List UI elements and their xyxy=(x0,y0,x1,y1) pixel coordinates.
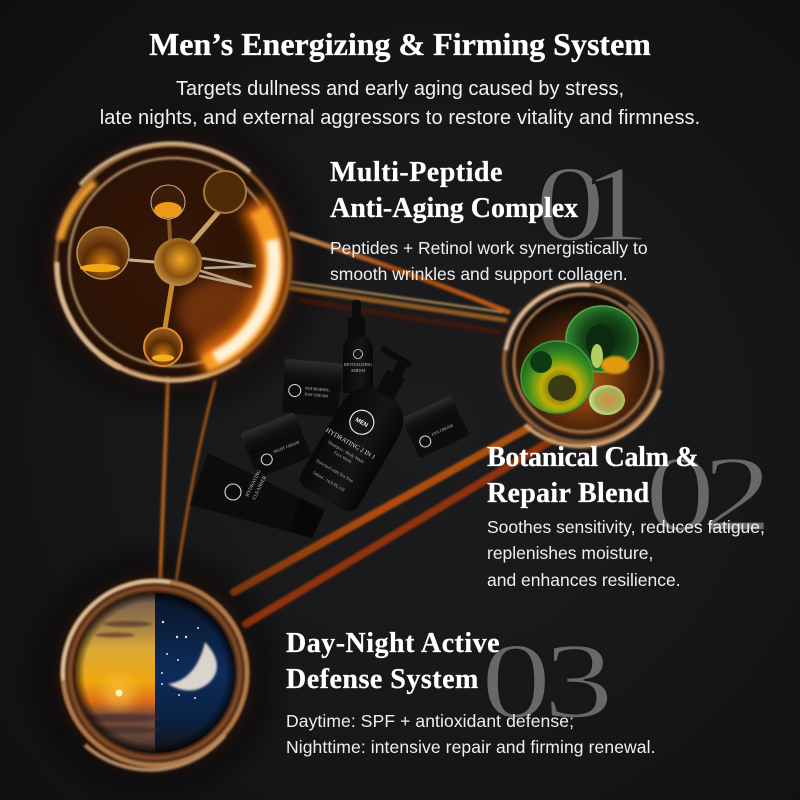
product: eye cream jar: EYE CREAM xyxy=(431,422,454,437)
feature 1 heading: Multi-Peptide xyxy=(330,157,503,188)
product: night cream jar: NIGHT CREAM xyxy=(272,439,300,454)
title: Men’s Energizing & Firming System xyxy=(149,26,651,62)
feature 3 heading xyxy=(286,628,500,694)
subtitle: Targets dullness and early aging caused by stress, xyxy=(176,78,624,100)
product: pump bottle: Shampoo / Body Wash xyxy=(327,439,366,465)
feature 3 heading: Day-Night Active xyxy=(286,628,500,659)
product: pump bottle: Face Wash xyxy=(333,450,353,464)
feature 3 description xyxy=(286,711,656,757)
feature 3 description: Daytime: SPF + antioxidant defense; xyxy=(286,711,574,731)
product: tube cleanser: CLEANSER xyxy=(252,475,268,501)
molecule arms xyxy=(130,208,256,328)
connecting light beams xyxy=(160,234,552,624)
product: tube cleanser: HYDRATING xyxy=(245,469,263,498)
product: pump bottle xyxy=(296,342,434,515)
feature 1 heading: Anti-Aging Complex xyxy=(330,192,578,224)
feature 2 heading xyxy=(487,442,698,508)
product: pump bottle: 500ml / 16.9 FL.OZ xyxy=(312,470,346,493)
icon: botanical cell sphere xyxy=(501,281,665,446)
product: pump bottle: Enriched with Tea Tree xyxy=(315,458,354,484)
numeral 03: 03 xyxy=(481,622,606,741)
product: eye cream jar xyxy=(401,395,470,458)
product group xyxy=(190,300,470,538)
feature 1 description xyxy=(330,238,648,284)
icon: day and night sphere xyxy=(53,571,257,775)
product: tube cleanser xyxy=(190,453,325,538)
numeral 01: 01 xyxy=(535,145,626,264)
feature 2 description: replenishes moisture, xyxy=(487,543,653,563)
feature 2 description xyxy=(487,517,765,590)
product: night cream jar xyxy=(240,412,312,478)
product: day cream jar: NOURISHING xyxy=(305,385,330,393)
feature 2 description: and enhances resilience. xyxy=(487,570,681,590)
subtitle: late nights, and external aggressors to restore vitality and firmness. xyxy=(100,107,700,129)
feature 3 heading: Defense System xyxy=(286,664,479,694)
feature 1 description: Peptides + Retinol work synergistically to xyxy=(330,238,648,258)
product: day cream jar xyxy=(281,359,343,417)
product: serum dropper xyxy=(343,300,373,393)
feature 1 description: smooth wrinkles and support collagen. xyxy=(330,264,628,284)
icon: molecule sphere xyxy=(45,134,301,390)
product: pump bottle: HYDRATING 2 IN 1 xyxy=(324,427,376,461)
product: serum dropper: REVITALIZING xyxy=(344,362,372,367)
feature 2 description: Soothes sensitivity, reduces fatigue, xyxy=(487,517,765,537)
feature 1 heading xyxy=(330,157,578,224)
product: pump bottle: MEN xyxy=(354,417,369,429)
subtitle xyxy=(100,78,700,129)
feature 2 heading: Botanical Calm & xyxy=(487,442,698,473)
numeral 02: 02 xyxy=(645,435,759,554)
feature 3 description: Nighttime: intensive repair and firming renewal. xyxy=(286,737,656,757)
product: day cream jar: DAY CREAM xyxy=(304,391,328,398)
product: serum dropper: SERUM xyxy=(351,368,365,373)
feature 2 heading: Repair Blend xyxy=(487,478,650,508)
illustration layer: beams, spheres and products xyxy=(42,130,666,780)
